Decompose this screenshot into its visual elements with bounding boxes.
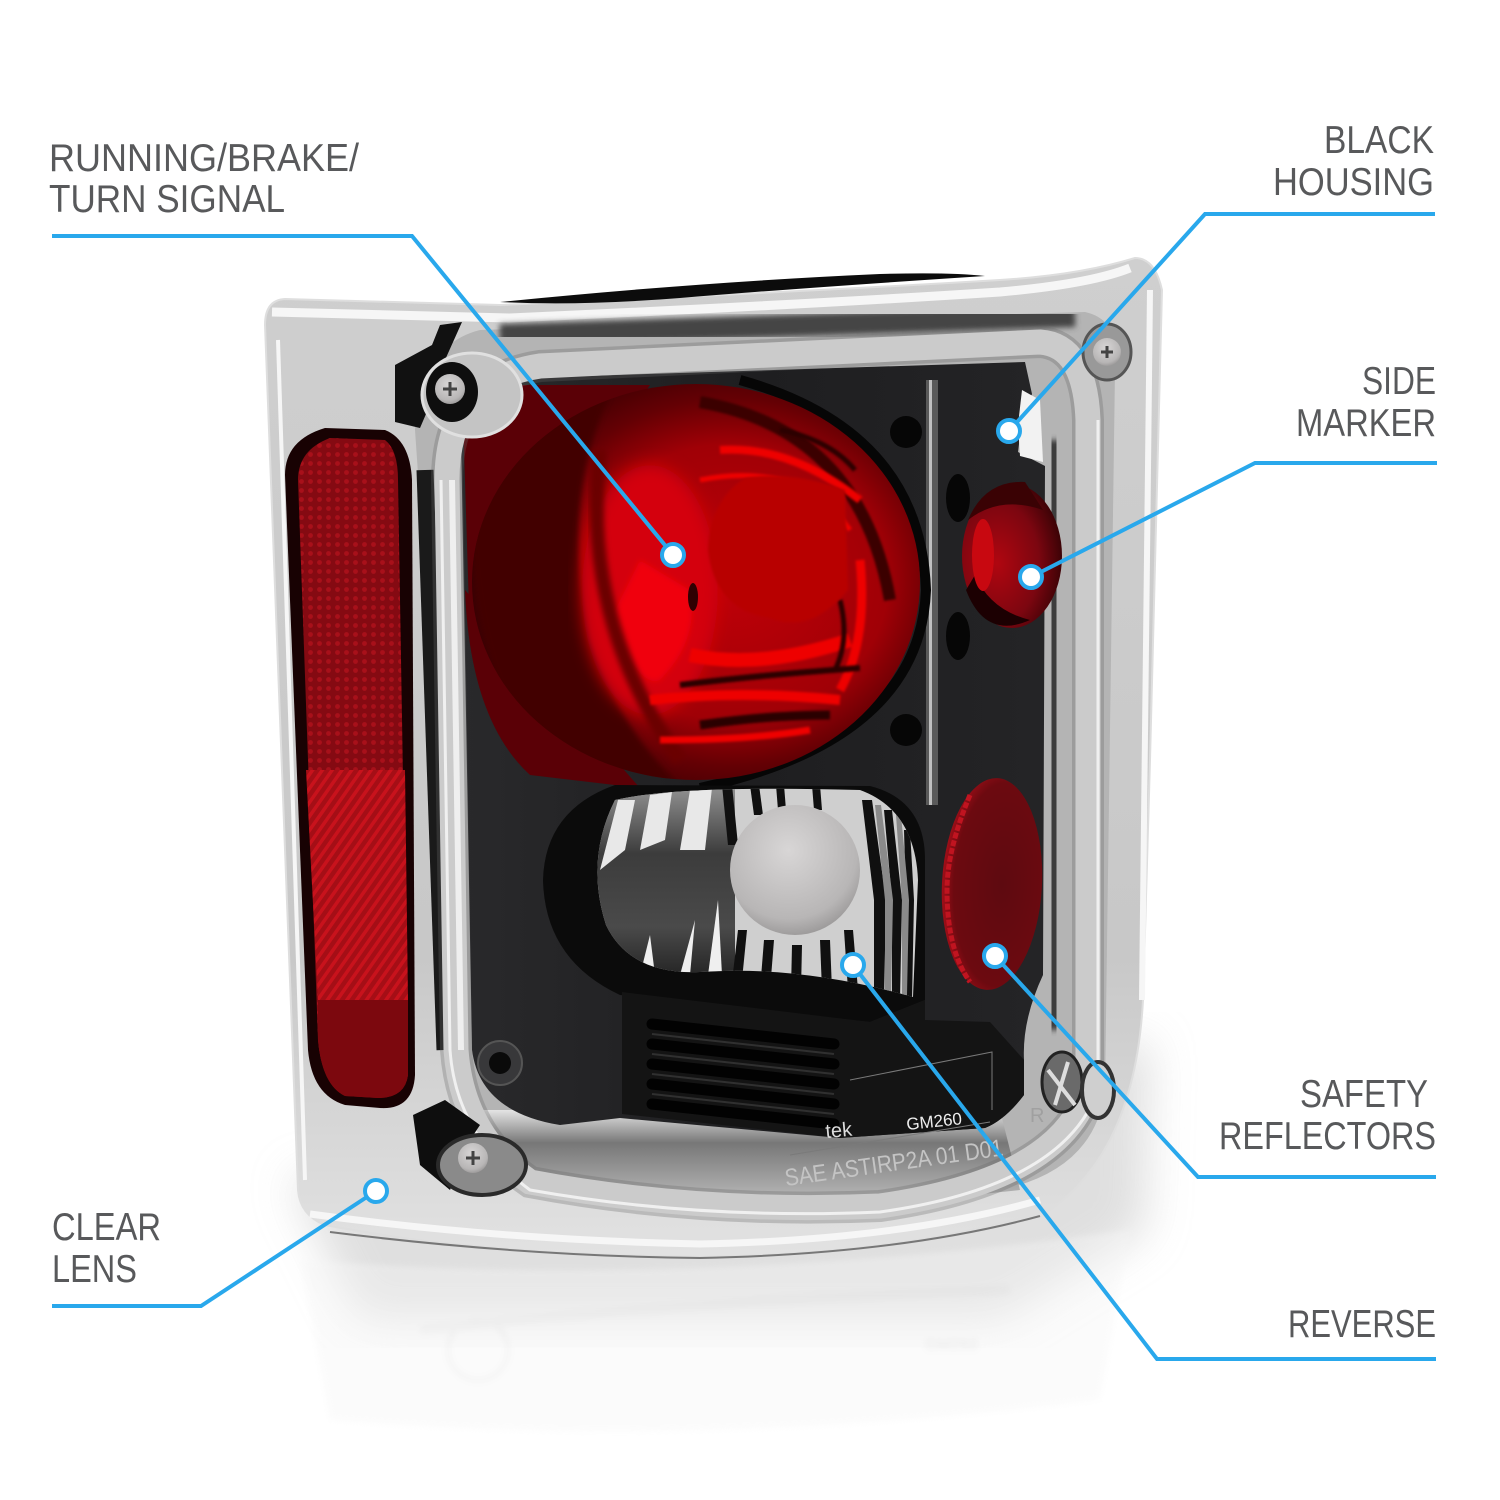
callout: clear lens	[52, 1180, 387, 1306]
centre disc	[708, 476, 848, 623]
callout: clear lens: CLEAR	[52, 1206, 161, 1249]
reverse grey ribs	[875, 805, 909, 995]
lens moulded text: GM260	[905, 1109, 963, 1134]
top housing sliver	[500, 273, 985, 303]
reverse lamp	[543, 780, 930, 1022]
reverse lens	[597, 788, 918, 997]
clear lens outer panel	[265, 258, 1162, 1257]
right dark stripe	[1052, 440, 1056, 1030]
red backing	[462, 385, 650, 640]
callout: black housing: HOUSING	[1273, 161, 1434, 204]
product shadow and reflection	[290, 1040, 1150, 1431]
reverse bulb disc	[730, 805, 860, 935]
left dark stripe	[425, 470, 445, 1050]
bright core	[582, 465, 718, 715]
lens moulded text: tek	[825, 1119, 854, 1143]
corner screw: bottom right	[1042, 1052, 1114, 1118]
callout: side marker	[1020, 360, 1437, 588]
housing screw holes	[890, 416, 970, 746]
vent grille	[622, 992, 1024, 1155]
corner screw: top left	[395, 322, 522, 437]
clear frame bands	[441, 342, 1098, 1214]
reverse surround	[543, 785, 925, 1022]
lens moulded text	[783, 1105, 1044, 1192]
dark left side	[492, 404, 674, 778]
white highlight in housing	[1018, 390, 1043, 462]
side marker lens	[962, 482, 1062, 628]
lower clear area	[480, 1110, 1020, 1204]
dark streaks	[680, 430, 860, 725]
tail light product	[265, 258, 1162, 1258]
safety reflector round	[937, 776, 1047, 992]
callout: running brake turn signal: TURN SIGNAL	[49, 178, 285, 221]
product shadow and reflection: GM260	[925, 1337, 978, 1354]
top dark band	[500, 316, 1075, 335]
reverse dark ribs	[722, 785, 914, 1000]
corner screw: top right	[1083, 324, 1131, 380]
callout: black housing	[998, 119, 1435, 442]
label outline	[790, 1052, 992, 1155]
lens dark edge line	[330, 1216, 1040, 1258]
black ring right side	[700, 380, 926, 788]
side reflector	[285, 428, 415, 1108]
lower left plate mount hole	[478, 1041, 522, 1085]
corner screw: bottom left	[413, 1100, 526, 1195]
bright streaks	[650, 450, 862, 740]
lens moulded text: R	[1030, 1105, 1044, 1127]
lens moulded text: SAE ASTIRP2A 01 D01	[783, 1135, 1005, 1192]
dark spot	[688, 583, 698, 611]
inner clear cavity	[415, 312, 1116, 1208]
callout: reverse	[842, 954, 1436, 1359]
callout: safety reflectors: SAFETY	[1300, 1073, 1428, 1116]
ring dark	[700, 402, 890, 600]
lens highlights	[272, 268, 1150, 1244]
callout: black housing: BLACK	[1324, 119, 1434, 162]
callout: side marker: SIDE	[1362, 360, 1436, 403]
callout: running brake turn signal: RUNNING/BRAKE/	[49, 137, 359, 180]
black housing plate	[460, 362, 1045, 1138]
running brake turn signal lens	[462, 380, 926, 788]
callout: safety reflectors	[984, 945, 1436, 1177]
callout: reverse: REVERSE	[1288, 1303, 1436, 1346]
callout: safety reflectors: REFLECTORS	[1219, 1115, 1436, 1158]
callout: clear lens: LENS	[52, 1248, 137, 1291]
callout: side marker: MARKER	[1296, 402, 1436, 445]
callout: running brake turn signal	[49, 137, 684, 566]
vertical housing rib	[926, 380, 938, 805]
